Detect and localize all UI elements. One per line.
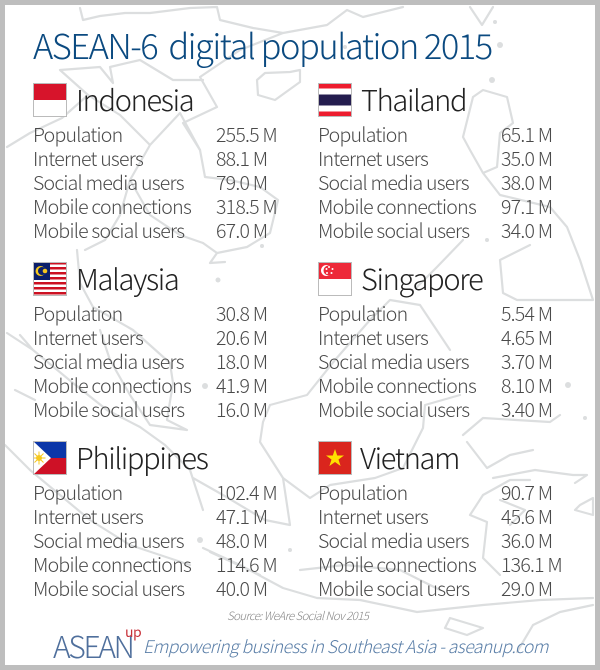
country name: Philippines — [76, 436, 208, 478]
panel: Singapore: Mobile social users — [318, 394, 469, 423]
panel: Philippines: Mobile social users — [33, 573, 184, 602]
panel: Malaysia — [33, 257, 267, 423]
panel: Philippines: 47.1 M — [216, 501, 267, 530]
panel: Indonesia: Internet users — [33, 143, 143, 172]
panel: Singapore: 5.54 M — [501, 298, 552, 327]
panel: Philippines: Mobile connections — [33, 549, 191, 578]
flag: Philippines — [33, 441, 67, 475]
panel: Philippines — [33, 436, 277, 602]
flag: Vietnam — [318, 441, 352, 475]
row values — [501, 477, 562, 602]
panel: Thailand: 34.0 M — [501, 215, 552, 244]
panel: Indonesia: Mobile social users — [33, 215, 184, 244]
panel: Philippines: Social media users — [33, 525, 184, 554]
row labels — [318, 298, 476, 423]
row values — [501, 119, 552, 244]
panel: Vietnam: Social media users — [318, 525, 469, 554]
panel: Malaysia: Social media users — [33, 346, 184, 375]
panel: Thailand: Social media users — [318, 167, 469, 196]
source note: Source: WeAre Social Nov 2015 — [227, 608, 368, 624]
panel: Indonesia: 88.1 M — [216, 143, 267, 172]
panel: Philippines: 48.0 M — [216, 525, 267, 554]
panel: Philippines: Population — [33, 477, 122, 506]
panel: Indonesia: 255.5 M — [216, 119, 277, 148]
panel: Singapore: Population — [318, 298, 407, 327]
panel: Malaysia: Population — [33, 298, 122, 327]
flag: Indonesia — [33, 83, 67, 117]
panel: Indonesia: Social media users — [33, 167, 184, 196]
panel: Indonesia: Mobile connections — [33, 191, 191, 220]
panel: Vietnam — [318, 436, 562, 602]
panel: Philippines: 40.0 M — [216, 573, 267, 602]
row labels — [33, 477, 192, 602]
flag: Malaysia — [33, 262, 67, 296]
panel: Thailand: Population — [318, 119, 407, 148]
panel: Indonesia — [33, 78, 277, 244]
panel: Philippines: 102.4 M — [216, 477, 277, 506]
panel: Indonesia: 67.0 M — [216, 215, 267, 244]
panel: Malaysia: 30.8 M — [216, 298, 267, 327]
panel: Indonesia: 79.0 M — [216, 167, 267, 196]
flag: Thailand — [318, 83, 352, 117]
panel: Thailand: 97.1 M — [501, 191, 552, 220]
panel: Thailand: 35.0 M — [501, 143, 552, 172]
panel: Thailand — [318, 78, 552, 244]
panel: Singapore: 4.65 M — [501, 322, 552, 351]
panel: Malaysia: Mobile social users — [33, 394, 184, 423]
country name: Indonesia — [76, 78, 193, 120]
row values — [216, 119, 277, 244]
panel: Thailand: Mobile social users — [318, 215, 469, 244]
panel: Thailand: Mobile connections — [318, 191, 476, 220]
title: ASEAN-6 digital population 2015 — [33, 19, 492, 69]
panel: Singapore: 3.40 M — [501, 394, 552, 423]
panel: Vietnam: Population — [318, 477, 407, 506]
panel: Vietnam: 136.1 M — [501, 549, 562, 578]
panel: Thailand: 65.1 M — [501, 119, 552, 148]
panel: Indonesia: Population — [33, 119, 122, 148]
panel: Malaysia: Mobile connections — [33, 370, 191, 399]
panel: Vietnam: Mobile connections — [318, 549, 476, 578]
row values — [216, 298, 267, 423]
logo: ASEANup: up — [125, 622, 141, 642]
panel: Malaysia: Internet users — [33, 322, 143, 351]
panel: Thailand: Internet users — [318, 143, 428, 172]
panel: Singapore: Internet users — [318, 322, 428, 351]
row labels — [33, 298, 192, 423]
panel: Vietnam: 45.6 M — [501, 501, 552, 530]
country name: Vietnam — [360, 436, 459, 478]
row labels — [318, 477, 476, 602]
row labels — [318, 119, 476, 244]
panel: Malaysia: 20.6 M — [216, 322, 267, 351]
panel: Malaysia: 41.9 M — [216, 370, 267, 399]
panel: Singapore: 8.10 M — [501, 370, 552, 399]
panel: Singapore: Mobile connections — [318, 370, 476, 399]
panel: Singapore: Social media users — [318, 346, 469, 375]
panel: Vietnam: 36.0 M — [501, 525, 552, 554]
panel: Vietnam: 29.0 M — [501, 573, 552, 602]
row values — [216, 477, 277, 602]
row values — [501, 298, 552, 423]
flag: Singapore — [318, 262, 352, 296]
panel: Vietnam: Internet users — [318, 501, 428, 530]
country name: Malaysia — [76, 257, 178, 299]
country name: Singapore — [361, 257, 482, 299]
panel: Singapore — [318, 257, 552, 423]
panel: Philippines: 114.6 M — [216, 549, 277, 578]
tagline: Empowering business in Southeast Asia - aseanup.com — [143, 634, 548, 659]
panel: Singapore: 3.70 M — [501, 346, 552, 375]
panel: Vietnam: Mobile social users — [318, 573, 469, 602]
panel: Thailand: 38.0 M — [501, 167, 552, 196]
panel: Malaysia: 18.0 M — [216, 346, 267, 375]
row labels — [33, 119, 192, 244]
panel: Indonesia: 318.5 M — [216, 191, 277, 220]
country name: Thailand — [361, 78, 466, 120]
logo: ASEANup: ASEAN — [53, 623, 133, 667]
panel: Vietnam: 90.7 M — [501, 477, 552, 506]
panel: Philippines: Internet users — [33, 501, 143, 530]
panel: Malaysia: 16.0 M — [216, 394, 267, 423]
